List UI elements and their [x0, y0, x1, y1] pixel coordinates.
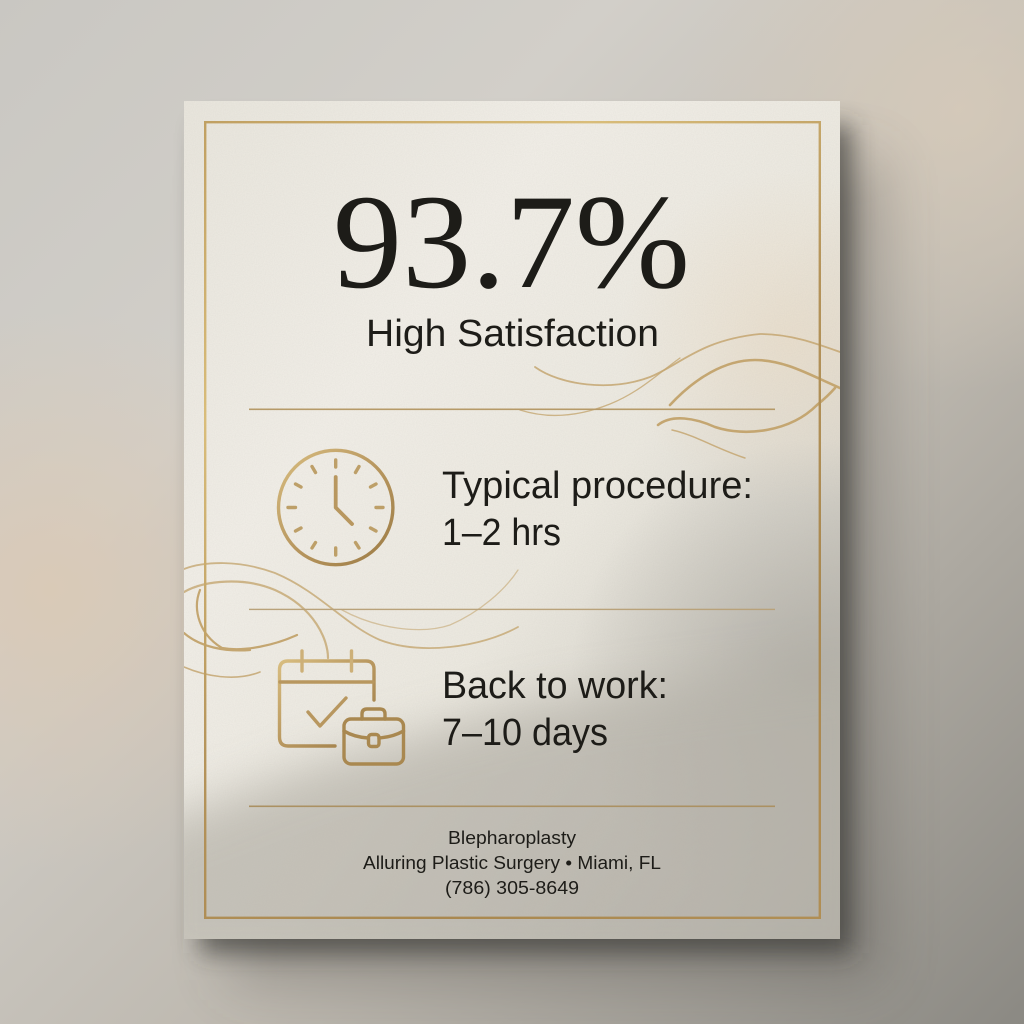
divider 2: [249, 609, 775, 610]
headline stat: 93.7%: [333, 168, 690, 317]
footer text: (786) 305-8649: [445, 877, 579, 898]
footer text: Alluring Plastic Surgery • Miami, FL: [363, 852, 661, 873]
gold border frame: [205, 122, 820, 918]
divider 1: [249, 408, 775, 410]
decorative swirls lower left: [184, 563, 518, 677]
card drop shadow: [200, 125, 880, 980]
stat label: High Satisfaction: [366, 313, 659, 355]
panel: card: [184, 101, 840, 939]
footer text: [363, 827, 661, 898]
divider 3: [249, 806, 775, 807]
decorative swirls upper right: [520, 334, 840, 458]
procedure text: [442, 465, 753, 554]
footer text: Blepharoplasty: [448, 827, 577, 848]
icon: calendar with briefcase: [280, 651, 404, 764]
return to work text: Back to work:: [442, 665, 668, 707]
return to work text: [442, 665, 668, 754]
procedure text: 1–2 hrs: [442, 512, 561, 554]
icon: clock: [278, 450, 393, 565]
return to work text: 7–10 days: [442, 712, 608, 754]
procedure text: Typical procedure:: [442, 465, 753, 507]
